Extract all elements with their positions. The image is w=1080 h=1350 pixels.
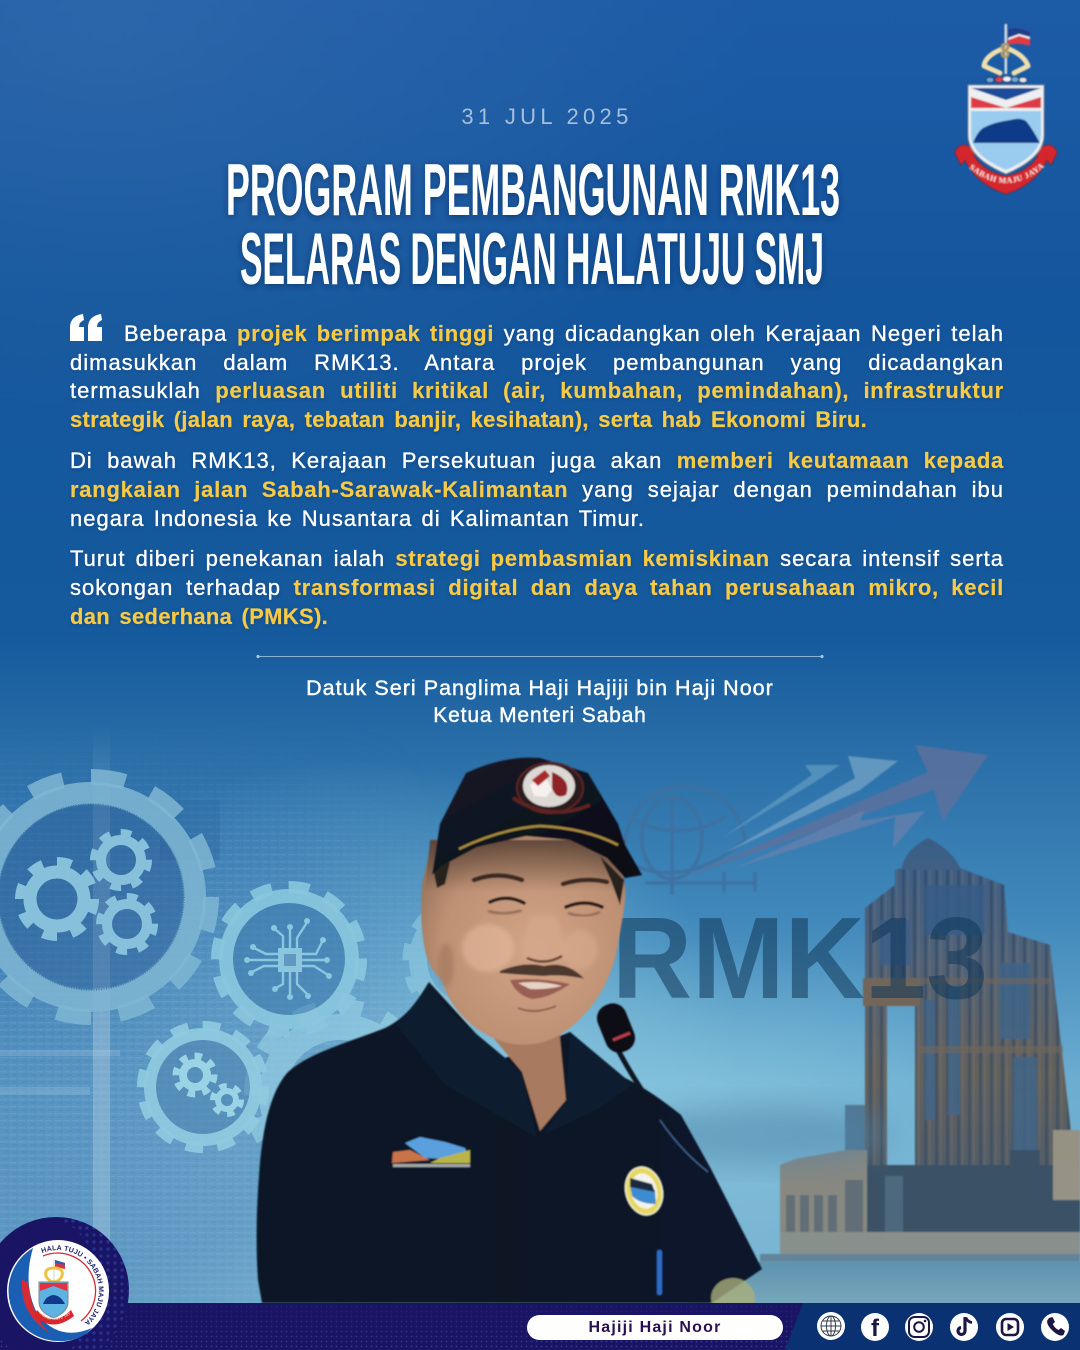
rmk13 arrows and globe logo (623, 745, 988, 895)
gear: far right behind portrait (407, 897, 533, 1023)
footer bar (0, 1303, 1080, 1350)
shirt badge (621, 1163, 667, 1219)
icon: globe (623, 786, 755, 895)
text: negara Indonesia ke Nusantara di Kalimantan Timur. (70, 506, 645, 531)
icon: facebook (861, 1313, 889, 1342)
forehead brim shadow (425, 840, 625, 892)
microphone (593, 999, 708, 1172)
shirt (257, 982, 762, 1303)
icon: instagram (905, 1313, 933, 1341)
icon: quotation mark (70, 314, 102, 341)
gears group (0, 777, 533, 1183)
data centre texture, left (0, 749, 448, 1303)
tower main mass (865, 838, 1072, 1172)
right building (1053, 1130, 1080, 1200)
portrait: man with cap (257, 758, 762, 1318)
cheek highlights (462, 924, 514, 972)
footer: social band (785, 1303, 1080, 1350)
shirt logo (392, 1137, 470, 1167)
name pill: Hajiji Haji Noor (588, 1319, 722, 1336)
hair side (433, 862, 450, 888)
head and ear (421, 832, 625, 1045)
gear: chip (217, 887, 361, 1031)
ribbon (954, 144, 1058, 196)
title (226, 150, 840, 300)
date: 31 JUL 2025 (461, 104, 633, 129)
nose (522, 915, 566, 962)
text: rangkaian jalan Sabah-Sarawak-Kalimantan yang sejajar dengan pemindahan ibu (70, 477, 1004, 502)
tower arch band (863, 978, 920, 1006)
text: Turut diberi penekanan ialah strategi pembasmian kemiskinan secara intensif serta (70, 546, 1004, 571)
icon: small crest: SABAH MAJU JAYA (39, 1312, 70, 1320)
icon: website globe (817, 1312, 845, 1340)
arrow: mid light (725, 756, 898, 853)
cap (432, 758, 642, 878)
divider (256, 655, 824, 658)
social icons (817, 1312, 1069, 1342)
text: dan sederhana (PMKS). (70, 604, 328, 629)
arrow: lower (735, 810, 925, 868)
text: dimasukkan dalam RMK13. Antara projek pembangunan yang dicadangkan (70, 350, 1004, 375)
podium centre (867, 1165, 1080, 1235)
footer: navy dotted band (0, 1303, 810, 1350)
attribution (306, 676, 774, 727)
shield (968, 85, 1044, 174)
arrow: small light (722, 765, 840, 838)
tower facade columns (865, 870, 1072, 1172)
crest: sabah coat of arms (954, 23, 1058, 196)
podium left building (780, 1150, 867, 1254)
neck (470, 1010, 566, 1131)
icon: phone (1041, 1313, 1069, 1341)
pen (657, 1250, 662, 1295)
gear: lower behind portrait (252, 1007, 428, 1183)
badge: hala tuju sabah maju jaya: HALA TUJU • SABAH MAJU JAYA (41, 1245, 104, 1325)
icon: tiktok (950, 1313, 978, 1341)
quote text block (70, 321, 1004, 630)
gear: arrows (142, 1026, 264, 1148)
badge: hala tuju sabah maju jaya (0, 1217, 129, 1349)
moustache (500, 965, 581, 977)
attribution: Ketua Menteri Sabah (433, 704, 647, 727)
eyes (490, 898, 602, 907)
name pill (527, 1315, 783, 1340)
gear: large (0, 777, 211, 1017)
cap badge (513, 763, 590, 813)
waterfront (630, 1105, 1080, 1303)
icon: youtube play (996, 1313, 1024, 1341)
ribbon: SABAH MAJU JAYA (968, 163, 1045, 184)
attribution: Datuk Seri Panglima Haji Hajiji bin Haji Noor (306, 676, 774, 700)
collar (395, 982, 632, 1138)
flag and pole (1004, 24, 1030, 74)
text: Di bawah RMK13, Kerajaan Persekutuan juga akan memberi keutamaan kepada (70, 448, 1004, 473)
small tower (845, 1105, 865, 1150)
mouth (510, 979, 570, 999)
icon: facebook: f (871, 1315, 880, 1342)
arms (984, 44, 1028, 73)
text: sokongan terhadap transformasi digital dan daya tahan perusahaan mikro, kecil (70, 575, 1004, 600)
icon: circuit chip (248, 924, 328, 996)
text: Beberapa projek berimpak tinggi yang dicadangkan oleh Kerajaan Negeri telah (124, 321, 1004, 346)
tower building (760, 838, 1080, 1262)
text: termasuklah perluasan utiliti kritikal (air, kumbahan, pemindahan), infrastruktur (70, 378, 1004, 403)
waterfront wall (780, 1232, 1080, 1254)
text: strategik (jalan raya, tebatan banjir, kesihatan), serta hab Ekonomi Biru. (70, 407, 867, 432)
rmk13 wordmark: RMK13 (612, 893, 988, 1023)
eyebrows (474, 876, 607, 884)
icon: small crest (8, 1250, 108, 1324)
tower windows (880, 885, 1037, 1166)
gold emblem at podium (711, 1278, 755, 1318)
horizontal bands (915, 978, 1063, 1053)
beads (986, 76, 1027, 83)
icon: small gears in large gear (20, 833, 154, 951)
arrow: large (680, 745, 988, 879)
icon: gears with arrows (176, 1056, 241, 1114)
